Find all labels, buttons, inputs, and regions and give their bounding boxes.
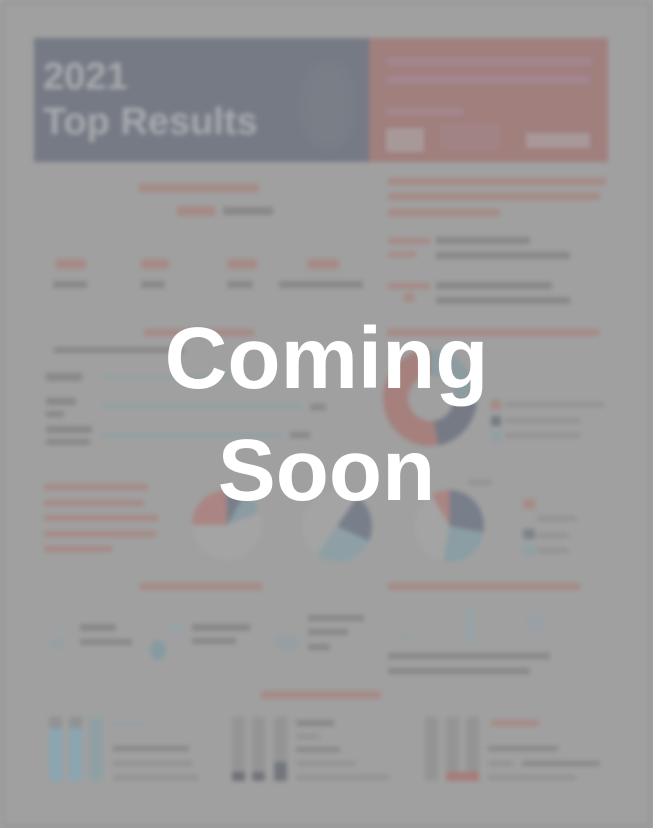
- panel: bottom section heading: [261, 691, 381, 699]
- heading: Coming: Coming: [165, 310, 488, 407]
- panel: icon stats section: [80, 582, 364, 660]
- stat columns: [52, 258, 364, 289]
- bar row 1: [46, 372, 82, 382]
- title: [42, 56, 258, 144]
- icon stat 1: [80, 623, 132, 646]
- intro text: [54, 347, 184, 353]
- icons: [468, 614, 472, 640]
- panel: pie comparison text: [44, 483, 158, 553]
- highlight item 2: [388, 281, 570, 305]
- heading: Soon: Soon: [218, 422, 435, 519]
- panel: column chart 1: [48, 717, 196, 782]
- panel: header title: [34, 38, 369, 162]
- callout heading lines: [386, 57, 592, 84]
- callout logo box: [386, 128, 424, 152]
- heading: [387, 329, 599, 336]
- caption: [388, 652, 550, 675]
- callout subheading: [386, 108, 464, 115]
- callout middle text: [439, 123, 501, 151]
- panel: column chart 3: [426, 718, 600, 783]
- decorative figure: [302, 63, 352, 148]
- icon stat 2: [149, 623, 250, 660]
- pie chart 3: [415, 490, 484, 562]
- pie label: [468, 480, 492, 485]
- title: 2021: [43, 56, 128, 98]
- callout button: [526, 133, 590, 148]
- donut legend: [489, 399, 602, 442]
- panel: summary stats: [52, 183, 364, 289]
- heading: [388, 583, 580, 590]
- title: Top Results: [43, 101, 258, 143]
- heading: [140, 583, 262, 590]
- panel: bar chart section: [46, 328, 326, 446]
- pie chart 2: [302, 490, 372, 562]
- bar row 2: [46, 397, 326, 418]
- heading: [139, 184, 259, 192]
- pie legend: [522, 498, 574, 555]
- donut chart: [383, 350, 477, 446]
- panel: header callout: [369, 38, 608, 162]
- bar row 3: [46, 425, 310, 446]
- heading: [144, 329, 254, 336]
- key figure: [176, 205, 274, 217]
- panel: right icons section: [387, 582, 581, 675]
- panel: donut chart section: [382, 328, 602, 448]
- panel: highlights: [387, 177, 607, 305]
- panel: column chart 2: [230, 718, 388, 783]
- pie chart 1: [192, 490, 262, 560]
- highlight item 1: [388, 236, 570, 260]
- icon stat 3: [308, 614, 364, 651]
- highlights heading: [387, 177, 607, 217]
